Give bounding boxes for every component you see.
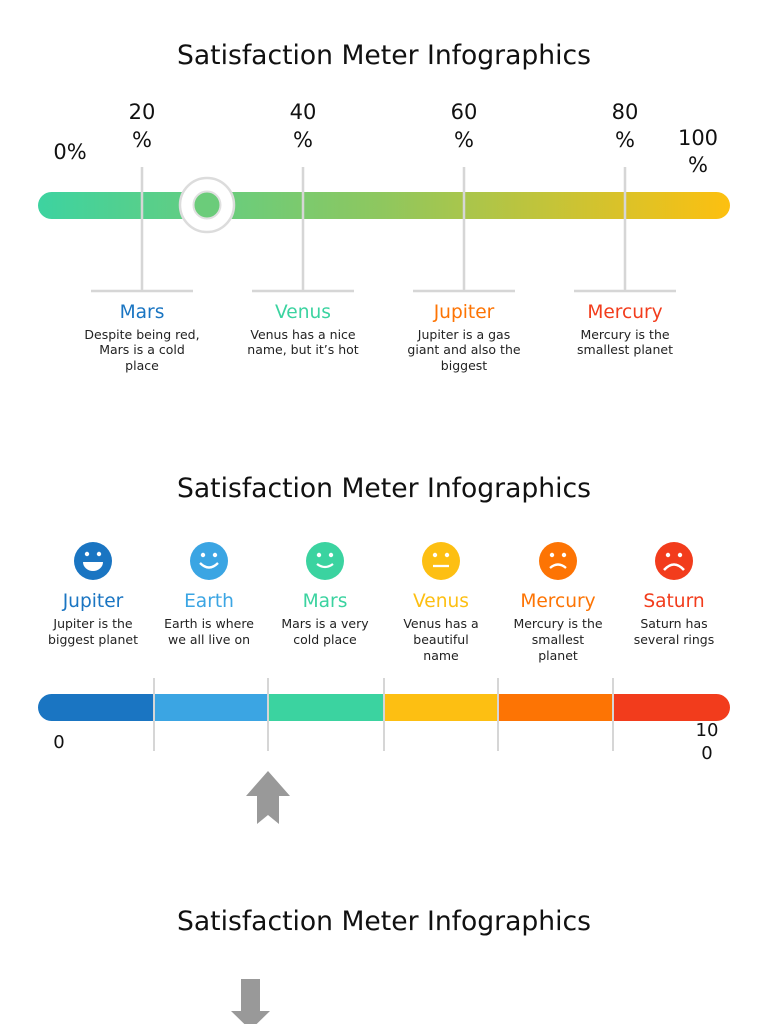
names and descriptions: we all live on [168, 632, 250, 647]
planet labels: Mercury is the [580, 327, 670, 342]
percent labels [53, 100, 718, 177]
planet labels: smallest planet [577, 342, 673, 357]
planet labels: place [125, 358, 159, 373]
percent labels: % [132, 128, 152, 152]
planet labels: Venus [275, 302, 331, 323]
title 2: Satisfaction Meter Infographics [177, 473, 591, 504]
percent labels: 20 [129, 100, 155, 124]
names and descriptions: Saturn has [640, 616, 708, 631]
title 1: Satisfaction Meter Infographics [177, 40, 591, 71]
names and descriptions: Venus has a [403, 616, 479, 631]
names and descriptions: several rings [634, 632, 714, 647]
percent labels: % [615, 128, 635, 152]
planet labels: Mars [120, 302, 164, 323]
planet labels: name, but it’s hot [247, 342, 359, 357]
percent labels: 80 [612, 100, 638, 124]
planet labels: biggest [441, 358, 487, 373]
percent labels: % [454, 128, 474, 152]
panel: gradient meter [38, 100, 730, 373]
gradient bar [38, 192, 730, 219]
names and descriptions: Earth [184, 591, 234, 612]
names and descriptions: Mars is a very [281, 616, 369, 631]
names and descriptions: Jupiter [62, 591, 124, 612]
planet labels [84, 302, 673, 373]
names and descriptions: cold place [293, 632, 357, 647]
names and descriptions: Venus [413, 591, 469, 612]
names and descriptions: biggest planet [48, 632, 138, 647]
scale labels: 0 [53, 732, 65, 753]
names and descriptions: Mercury [520, 591, 596, 612]
percent labels: 60 [451, 100, 477, 124]
arrow: down [231, 979, 270, 1024]
names and descriptions: planet [538, 648, 578, 663]
names and descriptions [48, 591, 714, 663]
percent labels: 100 [678, 126, 718, 150]
percent labels: % [293, 128, 313, 152]
percent labels: 40 [290, 100, 316, 124]
planet labels: Mercury [587, 302, 663, 323]
knob indicator [180, 178, 234, 232]
names and descriptions: Mars [303, 591, 347, 612]
planet labels: Jupiter is a gas [417, 327, 510, 342]
names and descriptions: beautiful [413, 632, 469, 647]
names and descriptions: smallest [532, 632, 584, 647]
percent labels: % [688, 153, 708, 177]
planet labels: Venus has a nice [250, 327, 356, 342]
scale labels [53, 720, 718, 764]
names and descriptions: name [423, 648, 459, 663]
planet labels: Despite being red, [84, 327, 200, 342]
names and descriptions: Earth is where [164, 616, 254, 631]
segmented bar [38, 678, 730, 751]
names and descriptions: Saturn [643, 591, 705, 612]
scale labels: 10 [696, 720, 718, 741]
icons: faces [74, 542, 693, 580]
names and descriptions: Mercury is the [513, 616, 603, 631]
planet labels: Mars is a cold [99, 342, 185, 357]
percent labels: 0% [53, 140, 87, 164]
planet labels: Jupiter [433, 302, 495, 323]
planet labels: giant and also the [407, 342, 521, 357]
title 3: Satisfaction Meter Infographics [177, 906, 591, 937]
scale labels: 0 [701, 743, 713, 764]
panel: emoji meter [38, 542, 730, 824]
arrow: up [246, 771, 290, 824]
names and descriptions: Jupiter is the [52, 616, 133, 631]
